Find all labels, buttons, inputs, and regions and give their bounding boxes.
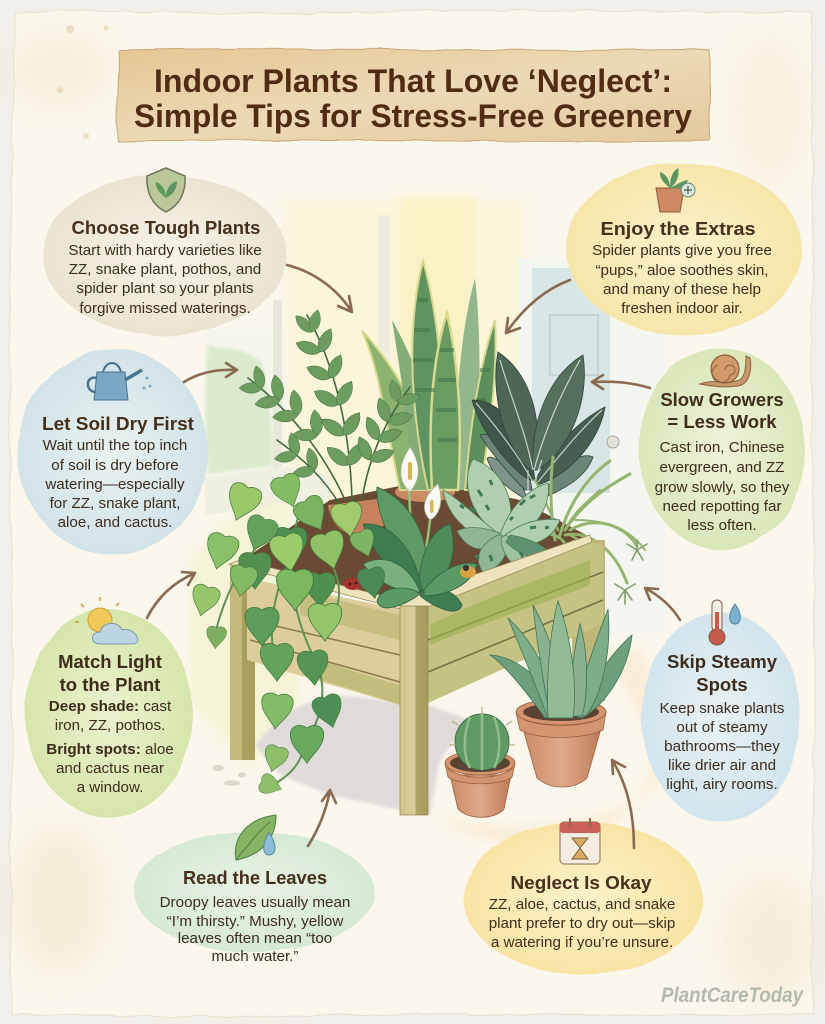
body text: Bright spots: aloe — [46, 741, 174, 758]
bubble: Match Light — [25, 597, 193, 817]
icon: sun behind cloud — [75, 597, 138, 644]
body text: of soil is dry before — [51, 457, 179, 474]
icon: leaf and droplet — [235, 815, 276, 860]
heading: Slow Growers — [660, 389, 784, 410]
body text: a window. — [77, 779, 143, 796]
arrow: tough plants to snake plant — [287, 265, 352, 312]
bubble: Skip Steamy Spots — [642, 600, 800, 822]
heading: Choose Tough Plants — [72, 217, 260, 238]
body text — [660, 700, 785, 793]
heading — [667, 651, 778, 695]
body text: bathrooms—they — [664, 738, 780, 755]
body text: out of steamy — [676, 719, 768, 736]
body text — [68, 242, 262, 317]
body text — [489, 896, 675, 951]
heading: = Less Work — [667, 411, 777, 432]
body text: Cast iron, Chinese — [660, 439, 784, 456]
body text: watering—especially — [44, 476, 185, 493]
body text: plant prefer to dry out—skip — [489, 915, 675, 932]
illustration: aloe in terracotta pot — [490, 601, 632, 787]
heading: to the Plant — [60, 674, 160, 695]
body text: freshen indoor air. — [621, 300, 743, 317]
body text: evergreen, and ZZ — [660, 459, 784, 476]
heading — [660, 389, 784, 432]
body text: a watering if you’re unsure. — [491, 934, 673, 951]
heading: Spots — [696, 674, 748, 695]
arrow: leaves to vine — [308, 790, 336, 846]
title text — [134, 63, 692, 134]
body text: forgive missed waterings. — [79, 300, 251, 317]
illustration: peace lily — [363, 447, 477, 611]
body text: Droopy leaves usually mean — [160, 894, 350, 911]
illustration: dark plant — [472, 352, 605, 505]
body text: like drier air and — [668, 757, 776, 774]
arrow: extras to plants — [506, 280, 570, 333]
body text: Start with hardy varieties like — [68, 242, 262, 259]
arrow: light to pothos — [147, 572, 195, 618]
icon: thermometer and droplet — [709, 600, 740, 645]
body text: less often. — [687, 517, 757, 534]
scene background: room with window and door — [190, 196, 666, 846]
body text — [592, 242, 772, 317]
illustration: cactus in terracotta pot — [445, 707, 515, 817]
body text — [160, 894, 350, 965]
body text: spider plant so your plants — [76, 280, 254, 297]
heading: Skip Steamy — [667, 651, 778, 672]
body text: Wait until the top inch — [43, 437, 187, 454]
body text: leaves often mean “too — [178, 930, 332, 947]
icon: shield with leaves — [147, 168, 185, 212]
arrow: neglect to aloe — [612, 760, 634, 848]
heading — [58, 651, 162, 695]
title banner — [117, 49, 710, 141]
arrow: soil to ZZ — [184, 363, 237, 382]
arrow: steamy to spider plant — [645, 588, 680, 620]
body text: and cactus near — [56, 760, 164, 777]
planter soil and back pots — [240, 480, 590, 602]
illustration: pothos vine — [187, 471, 388, 798]
illustration: ladybugs — [344, 565, 476, 590]
title text: Indoor Plants That Love ‘Neglect’: — [154, 63, 672, 99]
body text: Spider plants give you free — [592, 242, 772, 259]
illustration: planter box — [229, 535, 605, 815]
body text: iron, ZZ, pothos. — [55, 717, 165, 734]
heading: Enjoy the Extras — [600, 218, 756, 239]
heading: Let Soil Dry First — [42, 413, 194, 434]
body text: grow slowly, so they — [655, 479, 790, 496]
bubble: Read the Leaves — [134, 815, 374, 965]
bubble: Choose Tough Plants — [43, 168, 287, 335]
body text: ZZ, aloe, cactus, and snake — [489, 896, 675, 913]
white spathes — [401, 447, 441, 520]
baby spider plant pups — [565, 540, 647, 604]
bubble: Neglect Is Okay — [463, 818, 703, 974]
body text — [43, 437, 187, 531]
illustration: spotted dieffenbachia — [443, 459, 560, 575]
title text: Simple Tips for Stress-Free Greenery — [134, 98, 692, 134]
body text: for ZZ, snake plant, — [50, 495, 180, 512]
watermark: PlantCareToday — [661, 984, 804, 1007]
icon: potted plant with plus — [656, 168, 695, 212]
body text: Keep snake plants — [660, 700, 785, 717]
illustration: ZZ plant — [239, 309, 421, 505]
body text — [655, 439, 790, 534]
illustration: snake plant — [362, 261, 496, 490]
body text: “I’m thirsty.” Mushy, yellow — [167, 913, 343, 930]
icon: calendar and hourglass — [560, 818, 600, 864]
body text: and many of these help — [603, 281, 761, 298]
heading: Read the Leaves — [183, 867, 327, 888]
body text — [46, 698, 174, 796]
heading: Match Light — [58, 651, 162, 672]
illustration: spider plant — [525, 457, 647, 604]
bubble: Let Soil Dry First — [18, 349, 208, 555]
body text: light, airy rooms. — [666, 776, 778, 793]
heading: Neglect Is Okay — [510, 872, 652, 893]
body text: ZZ, snake plant, pothos, and — [69, 261, 261, 278]
body text: Deep shade: cast — [49, 698, 172, 715]
body text: aloe, and cactus. — [58, 514, 172, 531]
bubble: Enjoy the Extras — [566, 163, 802, 335]
body text: much water.” — [212, 948, 298, 965]
arrow: slow growers to dark plant — [592, 375, 650, 389]
body text: “pups,” aloe soothes skin, — [595, 262, 769, 279]
bubble: Slow Growers — [639, 348, 805, 550]
icon: snail — [700, 355, 751, 387]
body text: need repotting far — [662, 498, 782, 515]
icon: watering can — [88, 363, 152, 400]
